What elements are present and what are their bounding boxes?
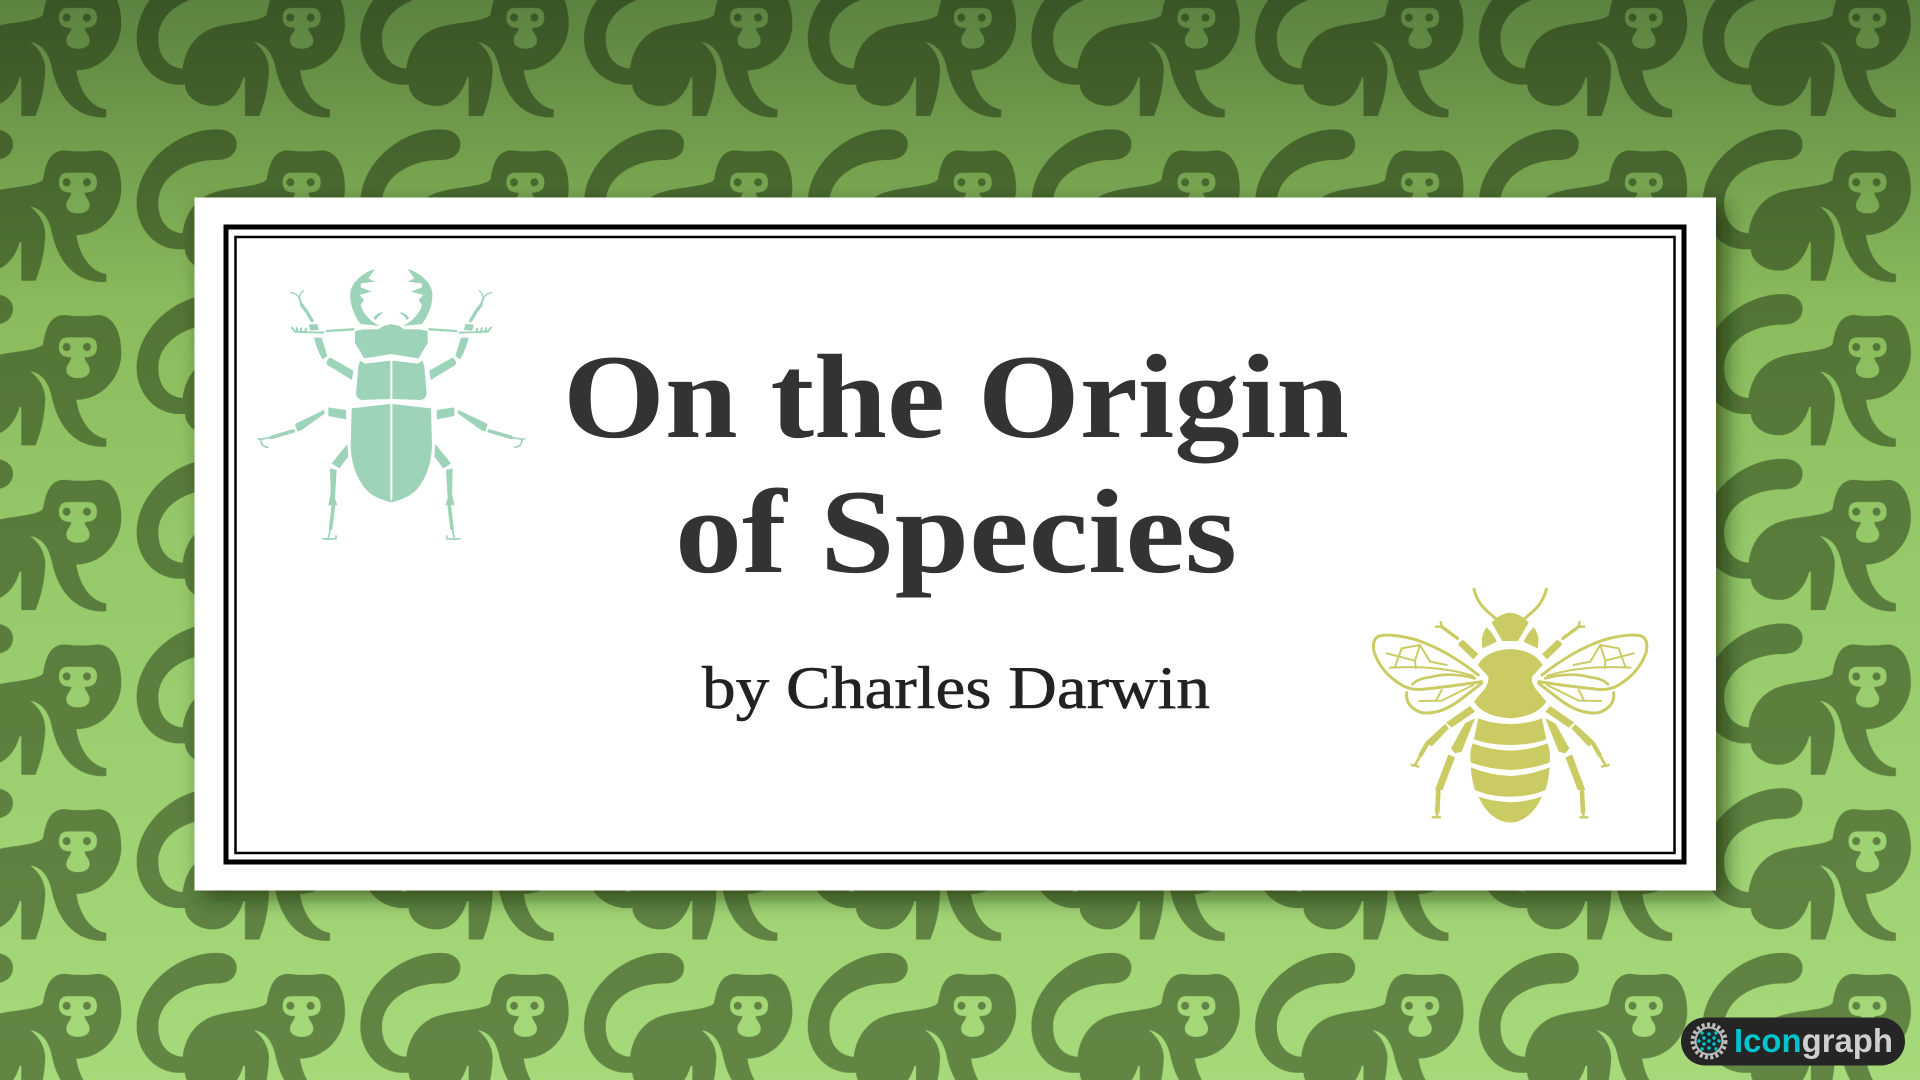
- icon: logo sunflower: [1692, 1024, 1726, 1058]
- title: [563, 330, 1349, 598]
- icon: bee: [1373, 589, 1647, 823]
- title: On the Origin: [563, 330, 1349, 464]
- card shadow: [202, 206, 1726, 898]
- logo wordmark: Icongraph: [1734, 1022, 1893, 1059]
- subtitle: author: by Charles Darwin: [702, 655, 1210, 721]
- logo: Icongraph: [1681, 1018, 1905, 1066]
- icon: stag beetle: [258, 269, 524, 539]
- panel: title card: [194, 198, 1716, 890]
- title: of Species: [675, 465, 1237, 598]
- decorative double frame: [226, 227, 1684, 862]
